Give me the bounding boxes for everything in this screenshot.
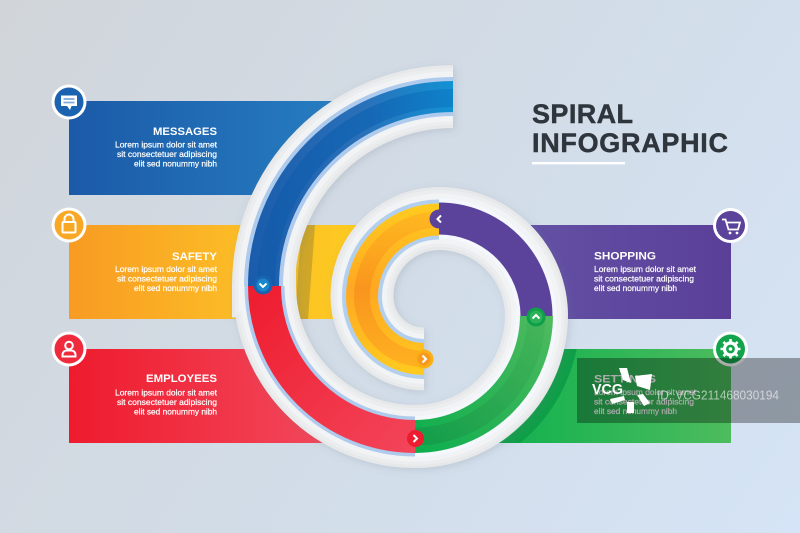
title underline	[532, 162, 625, 164]
title: INFOGRAPHIC	[532, 128, 728, 158]
title	[532, 99, 728, 158]
text block: shopping: Lorem ipsum dolor sit amet	[594, 265, 697, 274]
spiral	[264, 96, 536, 436]
marker: purple chevron	[430, 210, 448, 228]
icon: messages	[52, 84, 86, 120]
panel: settings	[499, 349, 731, 443]
spiral segment: red	[264, 286, 415, 436]
spiral segment: blue	[264, 96, 453, 286]
text block: messages: elit sed nonummy nibh	[134, 160, 217, 168]
spiral segment: yellow	[362, 220, 439, 359]
heading: messages: MESSAGES	[153, 126, 217, 138]
watermark: VCG	[592, 381, 623, 398]
text block: safety: Lorem ipsum dolor sit amet	[115, 265, 218, 274]
text block: messages: sit consectetuer adipiscing	[117, 150, 217, 159]
panel: employees	[69, 349, 340, 443]
text block: settings: elit sed nonummy nibh	[594, 407, 677, 416]
marker: blue chevron	[254, 276, 272, 294]
text block: safety: sit consectetuer adipiscing	[117, 274, 217, 284]
panel: shopping	[510, 225, 731, 319]
text block: settings: Lorem ipsum dolor sit amet	[594, 388, 697, 397]
shadow strip on safety panel	[296, 225, 315, 319]
heading: settings: SETTINGS	[594, 374, 656, 386]
text block: shopping: sit consectetuer adipiscing	[594, 274, 694, 284]
marker: green chevron	[526, 308, 546, 326]
text block: employees: Lorem ipsum dolor sit amet	[115, 388, 218, 398]
watermark	[577, 358, 800, 423]
text block: settings	[594, 388, 697, 416]
shadow arc on settings panel	[501, 349, 576, 443]
icon: employees person	[52, 332, 86, 366]
text block: employees: sit consectetuer adipiscing	[117, 398, 217, 407]
panel: messages	[69, 101, 345, 195]
spiral halo	[264, 96, 536, 436]
panel: safety	[69, 225, 360, 319]
marker: yellow chevron	[414, 350, 434, 368]
marker: red chevron	[407, 430, 424, 447]
watermark: ID: VCG211468030194	[657, 388, 779, 402]
spiral segment: purple	[439, 218, 536, 316]
text block: shopping	[594, 265, 697, 293]
text block: messages: Lorem ipsum dolor sit amet	[115, 140, 218, 150]
icon: safety lock	[52, 208, 86, 242]
heading: shopping: SHOPPING	[594, 250, 656, 262]
spiral segment: green	[415, 315, 536, 436]
text block: safety: elit sed nonummy nibh	[134, 284, 217, 293]
heading: safety: SAFETY	[172, 251, 218, 263]
heading: employees: EMPLOYEES	[146, 373, 217, 385]
text block: employees: elit sed nonummy nibh	[134, 408, 217, 416]
text block: settings: sit consectetuer adipiscing	[594, 398, 694, 406]
text block: shopping: elit sed nonummy nibh	[594, 284, 677, 293]
icon: shopping cart	[713, 208, 748, 243]
text block: messages	[115, 140, 218, 168]
text block: safety	[115, 265, 218, 293]
text block: employees	[115, 388, 218, 416]
icon: settings gear	[713, 332, 748, 366]
title: SPIRAL	[532, 99, 633, 129]
